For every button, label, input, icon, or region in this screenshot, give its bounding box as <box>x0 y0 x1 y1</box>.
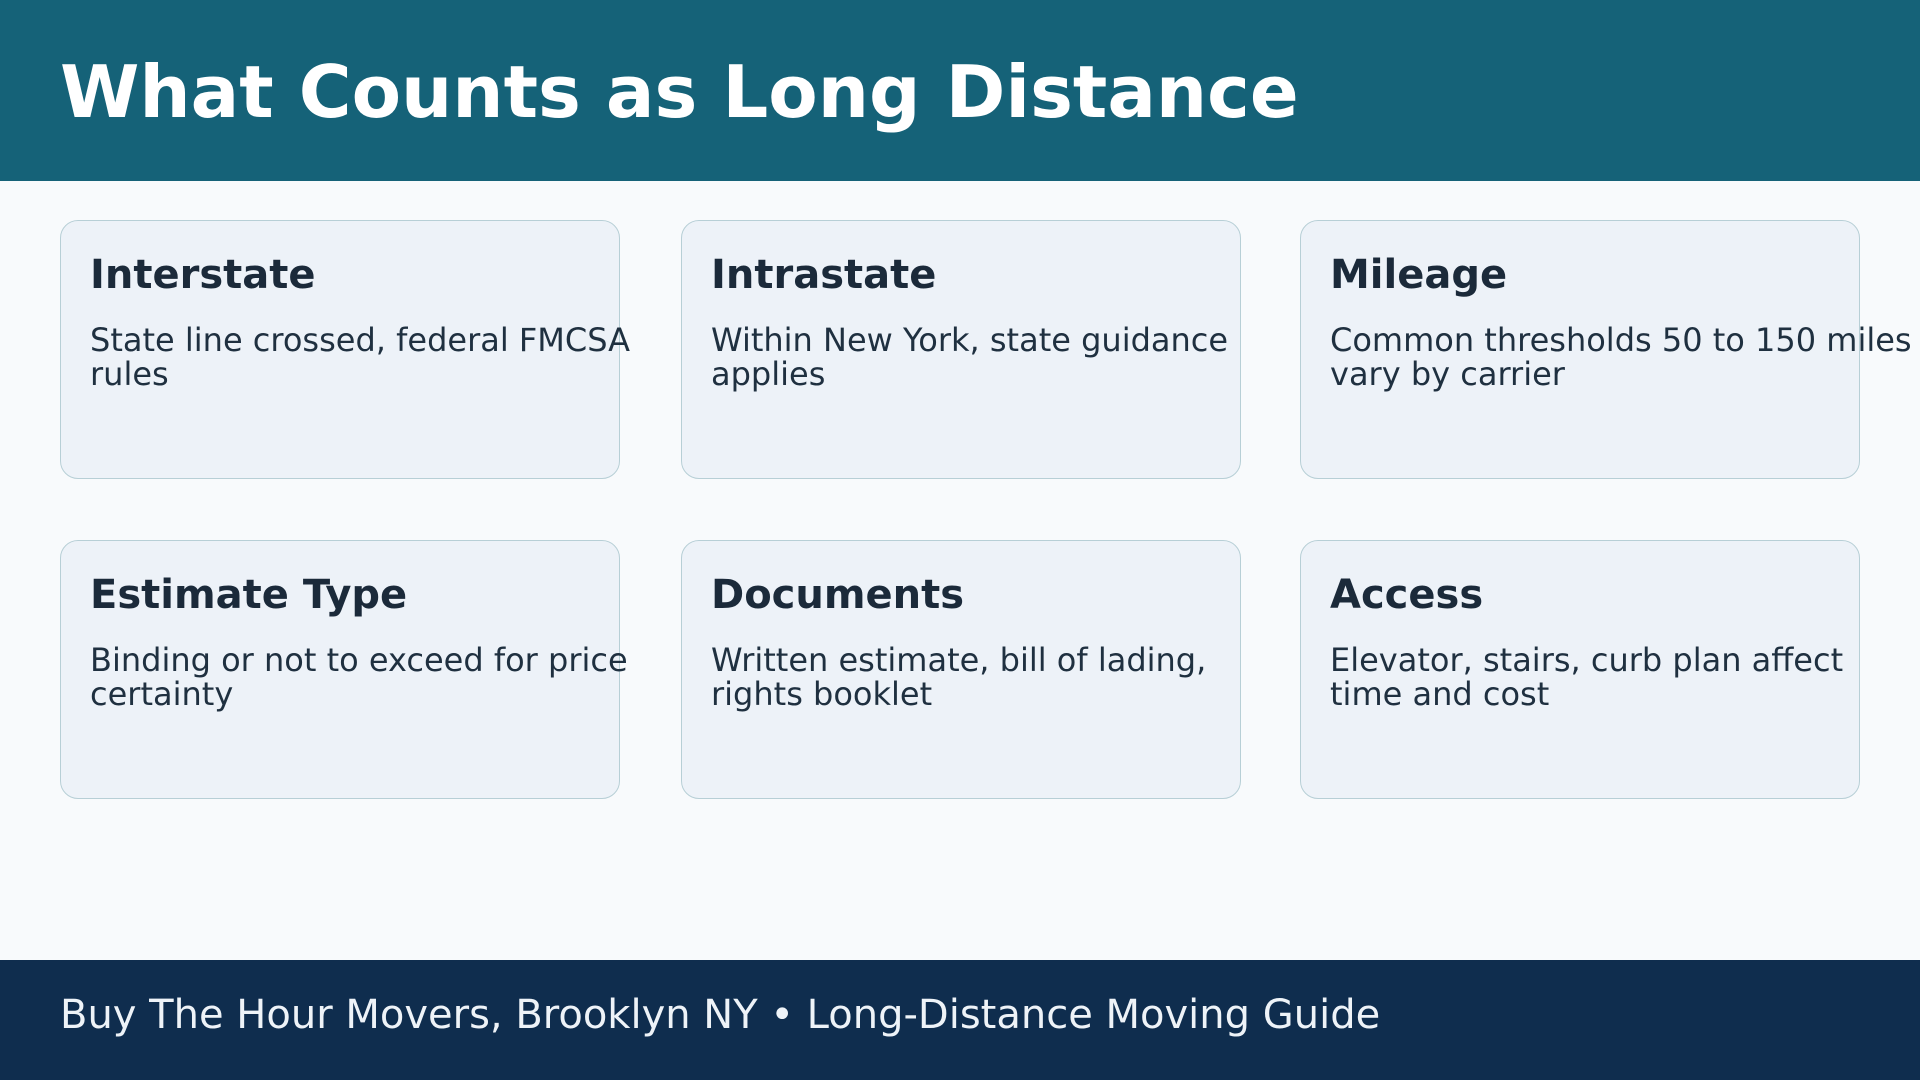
title: What Counts as Long Distance <box>60 50 1299 134</box>
footer <box>0 960 1920 1080</box>
card: access: Access <box>1330 572 1483 618</box>
card: intrastate: Intrastate <box>711 252 936 298</box>
card: interstate: State line crossed, federal FMCSA <box>90 321 630 359</box>
card: intrastate: applies <box>711 355 825 393</box>
card: mileage <box>1300 220 1860 479</box>
card: interstate: rules <box>90 355 169 393</box>
card: documents: rights booklet <box>711 675 932 713</box>
card: estimate type: certainty <box>90 675 233 713</box>
card: mileage: vary by carrier <box>1330 355 1565 393</box>
card: mileage: Mileage <box>1330 252 1507 298</box>
card: intrastate: Within New York, state guidance <box>711 321 1228 359</box>
card: documents: Written estimate, bill of lading, <box>711 641 1206 679</box>
card: access: time and cost <box>1330 675 1549 713</box>
card: access <box>1300 540 1860 799</box>
card: documents: Documents <box>711 572 964 618</box>
card: estimate type: Binding or not to exceed for price <box>90 641 628 679</box>
card: interstate <box>60 220 620 479</box>
card: estimate type <box>60 540 620 799</box>
card: interstate: Interstate <box>90 252 316 298</box>
header <box>0 0 1920 181</box>
card: mileage: Common thresholds 50 to 150 miles <box>1330 321 1912 359</box>
card: estimate type: Estimate Type <box>90 572 407 618</box>
footer text: Buy The Hour Movers, Brooklyn NY • Long-Distance Moving Guide <box>60 992 1380 1038</box>
card: intrastate <box>681 220 1241 479</box>
card: documents <box>681 540 1241 799</box>
card: access: Elevator, stairs, curb plan affect <box>1330 641 1843 679</box>
